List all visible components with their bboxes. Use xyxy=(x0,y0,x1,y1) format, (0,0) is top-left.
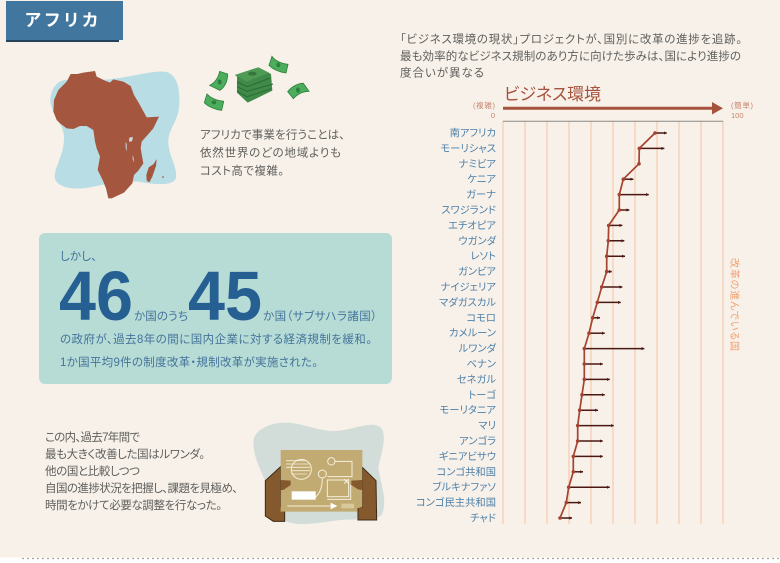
title banner: アフリカ xyxy=(25,11,98,30)
country labels: コンゴ共和国 xyxy=(437,465,496,478)
country labels: ベナン xyxy=(467,358,496,370)
panel: reform stat: しかし、 xyxy=(60,250,97,263)
country labels: スワジランド xyxy=(441,204,496,216)
country labels xyxy=(416,126,496,524)
text: cost: アフリカで事業を行うことは、 xyxy=(200,128,345,142)
text: Rwanda: 自国の進捗状況を把握し、課題を見極め、 xyxy=(45,481,238,495)
country labels: セネガル xyxy=(457,374,496,386)
text: project description xyxy=(400,32,742,80)
country labels: ガンビア xyxy=(458,266,496,278)
progress arrows xyxy=(560,133,667,518)
text: project description: 最も効率的なビジネス規制のあり方に向けた歩みは、国により進捗の xyxy=(400,49,741,63)
country labels: マリ xyxy=(478,421,496,432)
text: cost: 依然世界のどの地域よりも xyxy=(200,146,341,160)
text: Rwanda: 時間をかけて必要な調整を行なった。 xyxy=(45,498,222,512)
text: project description: 「ビジネス環境の現状」プロジェクトが、国別に改革の進捗を追跡。 xyxy=(400,32,742,46)
country labels: チャド xyxy=(470,512,496,524)
flying bills xyxy=(204,56,309,110)
scale labels: 100 xyxy=(731,111,744,120)
text: Rwanda: 最も大きく改善した国はルワンダ。 xyxy=(45,447,205,461)
text: Rwanda: 他の国と比較しつつ xyxy=(45,465,140,478)
text: cost xyxy=(200,128,345,178)
map of Africa xyxy=(50,71,179,198)
big number 46: 46 xyxy=(59,257,133,335)
stack of bills xyxy=(235,67,273,103)
chart: business environment xyxy=(416,85,754,524)
text: Rwanda: この内、過去7年間で xyxy=(45,430,140,444)
text: Rwanda xyxy=(45,430,238,512)
panel: reform stat: 1か国平均9件の制度改革・規制改革が実施された。 xyxy=(60,355,318,369)
panel: reform stat xyxy=(39,233,392,384)
plan sheet xyxy=(281,450,362,512)
country labels: ケニア xyxy=(467,174,496,186)
scale labels: (簡単) xyxy=(731,100,754,110)
country labels: アンゴラ xyxy=(459,434,496,448)
country labels: ガーナ xyxy=(466,189,496,201)
lakes xyxy=(126,137,134,162)
country labels: モーリタニア xyxy=(440,405,496,417)
country labels: ブルキナファソ xyxy=(432,481,496,494)
country labels: ルワンダ xyxy=(458,342,496,355)
scale arrow xyxy=(503,102,723,114)
country labels: ギニアビサウ xyxy=(439,451,496,463)
text: project description: 度合いが異なる xyxy=(400,66,484,80)
scale labels: (複雑) xyxy=(473,100,496,110)
country labels: カメルーン xyxy=(449,328,496,340)
icon blob xyxy=(253,423,384,524)
title banner xyxy=(6,1,123,42)
country labels: 南アフリカ xyxy=(450,126,496,140)
country labels: ナミビア xyxy=(458,158,496,170)
right hand xyxy=(358,467,377,520)
axis note: 改革の進んでいる国 xyxy=(728,258,741,351)
left hand xyxy=(265,467,285,521)
panel: reform stat: か国（サブサハラ諸国） xyxy=(263,309,377,323)
icon: money xyxy=(204,56,309,110)
country labels: マダガスカル xyxy=(439,296,496,309)
country labels: コモロ xyxy=(466,313,496,324)
plan drawing xyxy=(286,458,352,506)
country labels: ナイジェリア xyxy=(440,282,496,294)
country labels: トーゴ xyxy=(468,388,496,401)
icon: hands holding plan xyxy=(253,423,384,524)
country labels: モーリシャス xyxy=(440,144,496,155)
thumbs xyxy=(281,480,362,490)
Madagascar xyxy=(146,159,157,182)
baseline trend line xyxy=(560,133,655,518)
panel: reform stat: か国のうち xyxy=(134,310,188,323)
map background blob xyxy=(50,72,179,189)
country labels: コンゴ民主共和国 xyxy=(416,496,496,509)
scale labels: 0 xyxy=(491,111,495,120)
country labels: ウガンダ xyxy=(458,234,496,247)
chart heading: ビジネス環境 xyxy=(504,85,601,104)
scale labels xyxy=(473,100,754,120)
panel: reform stat: の政府が、過去8年の間に国内企業に対する経済規制を緩和。 xyxy=(60,332,372,346)
grid xyxy=(503,121,723,524)
big number 45: 45 xyxy=(188,257,262,335)
country labels: エチオピア xyxy=(448,220,496,232)
Africa continent xyxy=(53,71,159,198)
data points xyxy=(558,131,657,520)
text: cost: コスト高で複雑。 xyxy=(200,164,284,178)
country labels: レソト xyxy=(470,252,496,263)
